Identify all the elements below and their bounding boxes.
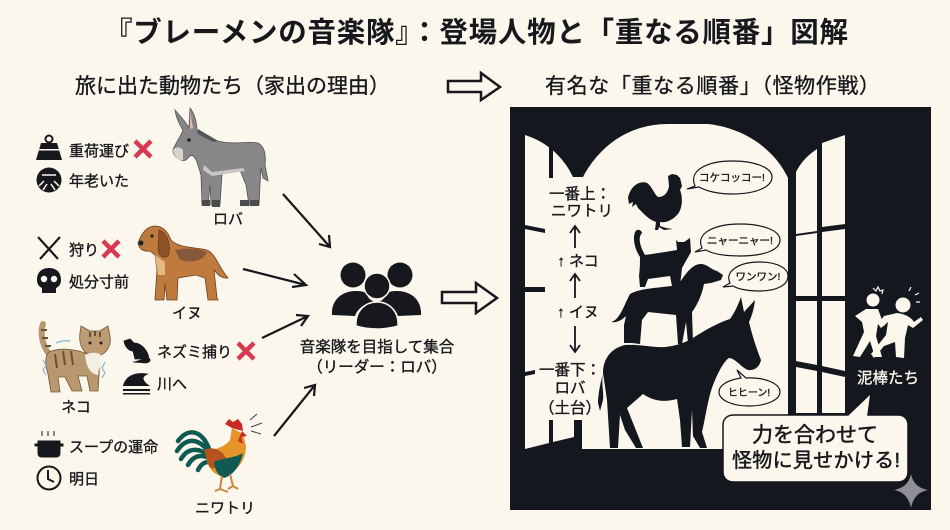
arrows to the group (243, 194, 330, 436)
cat illustration (41, 324, 110, 392)
callout (723, 393, 908, 482)
text: catching mice: ネズミ捕り (157, 344, 232, 361)
speech bubble: dog: ワンワン! (736, 271, 780, 283)
text: gather for the band: 音楽隊を目指して集合 (300, 338, 455, 356)
silhouette: rooster (628, 174, 682, 230)
icon: mouse (124, 339, 150, 363)
icon: clock (38, 466, 60, 490)
speech bubble: donkey: ヒヒーン! (728, 387, 770, 399)
arrows: stack order (570, 226, 580, 352)
window frame bars (525, 147, 553, 376)
text: tomorrow: 明日 (69, 471, 99, 488)
speech bubble: donkey (719, 370, 780, 406)
cat reasons (123, 339, 254, 394)
text: fate of soup: スープの運命 (69, 439, 158, 456)
label: rooster: ニワトリ (195, 500, 255, 517)
label: dog: イヌ (172, 305, 202, 322)
text: stack order: ↑ ネコ (557, 253, 599, 270)
open window panes (796, 135, 845, 413)
text: stack order: 一番下： (539, 361, 601, 379)
icon: group of people (332, 262, 421, 329)
speech bubble: cat (695, 224, 780, 256)
silhouette: cat (634, 230, 691, 287)
text: heavy loads: 重荷運び (69, 143, 129, 160)
text: stack order (539, 185, 613, 417)
silhouette: dog (611, 264, 723, 344)
title: 『ブレーメンの音楽隊』：登場人物と「重なる順番」図解 (104, 16, 848, 49)
icon: wave (123, 373, 150, 394)
callout: 怪物に見せかける! (732, 449, 900, 472)
speech bubble: dog (723, 262, 788, 291)
icon: crossed rifles (38, 237, 60, 259)
arrow: center hollow arrow (442, 283, 497, 313)
text: stack order: 一番上： (549, 185, 611, 203)
icon: old face (36, 168, 62, 192)
silhouette: donkey (598, 297, 761, 448)
label: donkey: ロバ (213, 211, 243, 228)
text: leader donkey: （リーダー：ロバ） (307, 358, 447, 376)
icon: red cross (238, 343, 254, 359)
heading: right: 有名な「重なる順番」（怪物作戦） (545, 75, 880, 98)
text: stack order: ニワトリ (551, 203, 613, 220)
speech bubble: rooster (687, 161, 772, 194)
callout: 力を合わせて (752, 424, 878, 447)
icon: weight (36, 136, 62, 160)
rooster reasons (35, 431, 158, 490)
donkey illustration (173, 108, 268, 207)
panel: window scene (510, 107, 931, 510)
text: to the river: 川へ (157, 376, 187, 393)
text: stack order: ↑ イヌ (557, 304, 599, 321)
text: stack order: ロバ (554, 380, 586, 397)
icon: sparkle (894, 474, 928, 508)
text: aged: 年老いた (69, 173, 129, 190)
label: robbers: 泥棒たち (857, 369, 919, 387)
text: hunting: 狩り (69, 242, 99, 259)
text: stack order: （土台） (539, 399, 601, 417)
arrow: heading hollow arrow (448, 73, 500, 100)
icon: skull (37, 268, 61, 293)
speech bubble: rooster: コケコッコー! (699, 172, 765, 184)
rooster illustration (177, 414, 262, 492)
icon: red cross (135, 141, 151, 157)
icon: soup pot (35, 431, 63, 457)
icon: fleeing robbers (853, 287, 923, 358)
heading: left: 旅に出た動物たち（家出の理由） (75, 75, 390, 98)
dog illustration (138, 226, 228, 300)
window main opening (525, 124, 788, 449)
icon: red cross (103, 241, 119, 257)
dog reasons (37, 237, 129, 293)
text: about to be put down: 処分寸前 (69, 274, 129, 291)
donkey reasons (36, 136, 151, 192)
label: cat: ネコ (61, 399, 91, 416)
speech bubble: cat: ニャーニャー! (707, 235, 773, 247)
